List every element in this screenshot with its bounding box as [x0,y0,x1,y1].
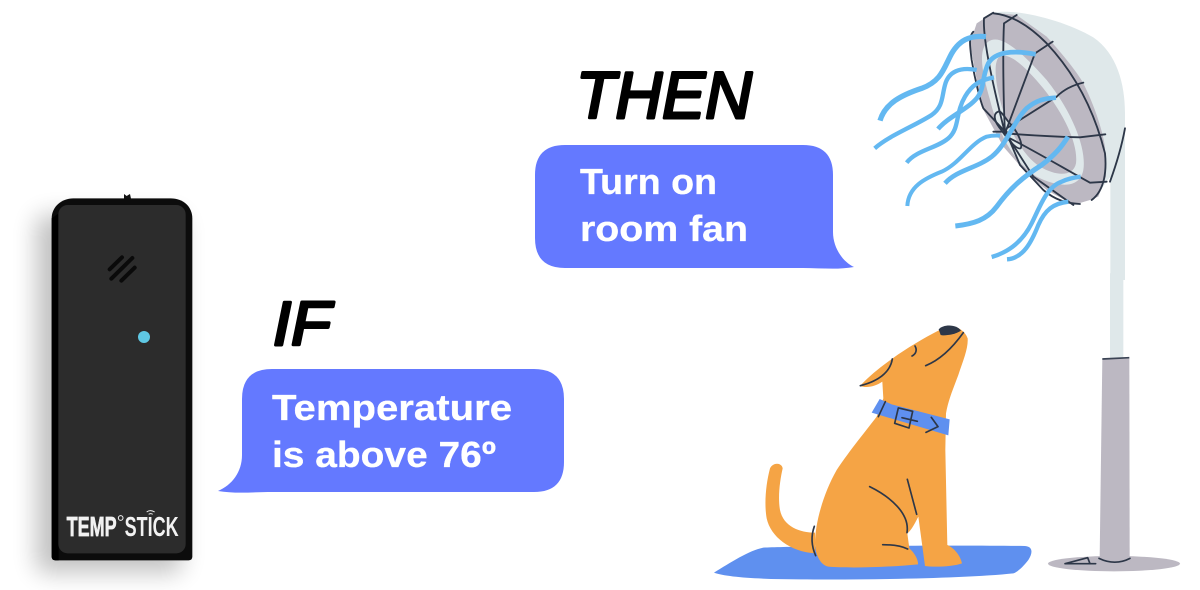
speech bubble: IF condition [218,369,564,493]
speech bubble: IF condition: Temperature [272,387,512,428]
speech bubble: THEN action: Turn on [580,161,717,202]
speech bubble: THEN action: room fan [580,208,748,249]
device logo [67,511,179,542]
speech bubble: THEN action [535,145,854,269]
dog on mat [714,325,1031,579]
dog nose [939,325,961,335]
fan stand and base [1048,273,1180,571]
dog body [815,327,968,567]
fan inner ring [982,40,1084,185]
speech bubble: IF condition: is above 76º [272,434,496,475]
fan guard wires [970,13,1125,205]
mat [714,546,1031,579]
heading: IF: IF [273,290,334,359]
fan pole upper section [1110,273,1123,360]
fan pole [1100,359,1130,561]
dog line details [812,333,963,556]
icon: vent slots [110,257,135,281]
fan base [1048,556,1180,571]
device: Temp Stick sensor [36,194,192,573]
airflow lines [875,36,1081,259]
heading: THEN: THEN [576,58,752,132]
dog tail [765,464,815,553]
device logo: TEMP [67,511,117,542]
device logo: STICK [125,511,179,542]
dog collar [872,399,950,435]
fan rear housing and neck [993,12,1125,280]
fan dish [970,13,1106,205]
icon: status LED [138,331,150,343]
fan head [875,12,1125,280]
